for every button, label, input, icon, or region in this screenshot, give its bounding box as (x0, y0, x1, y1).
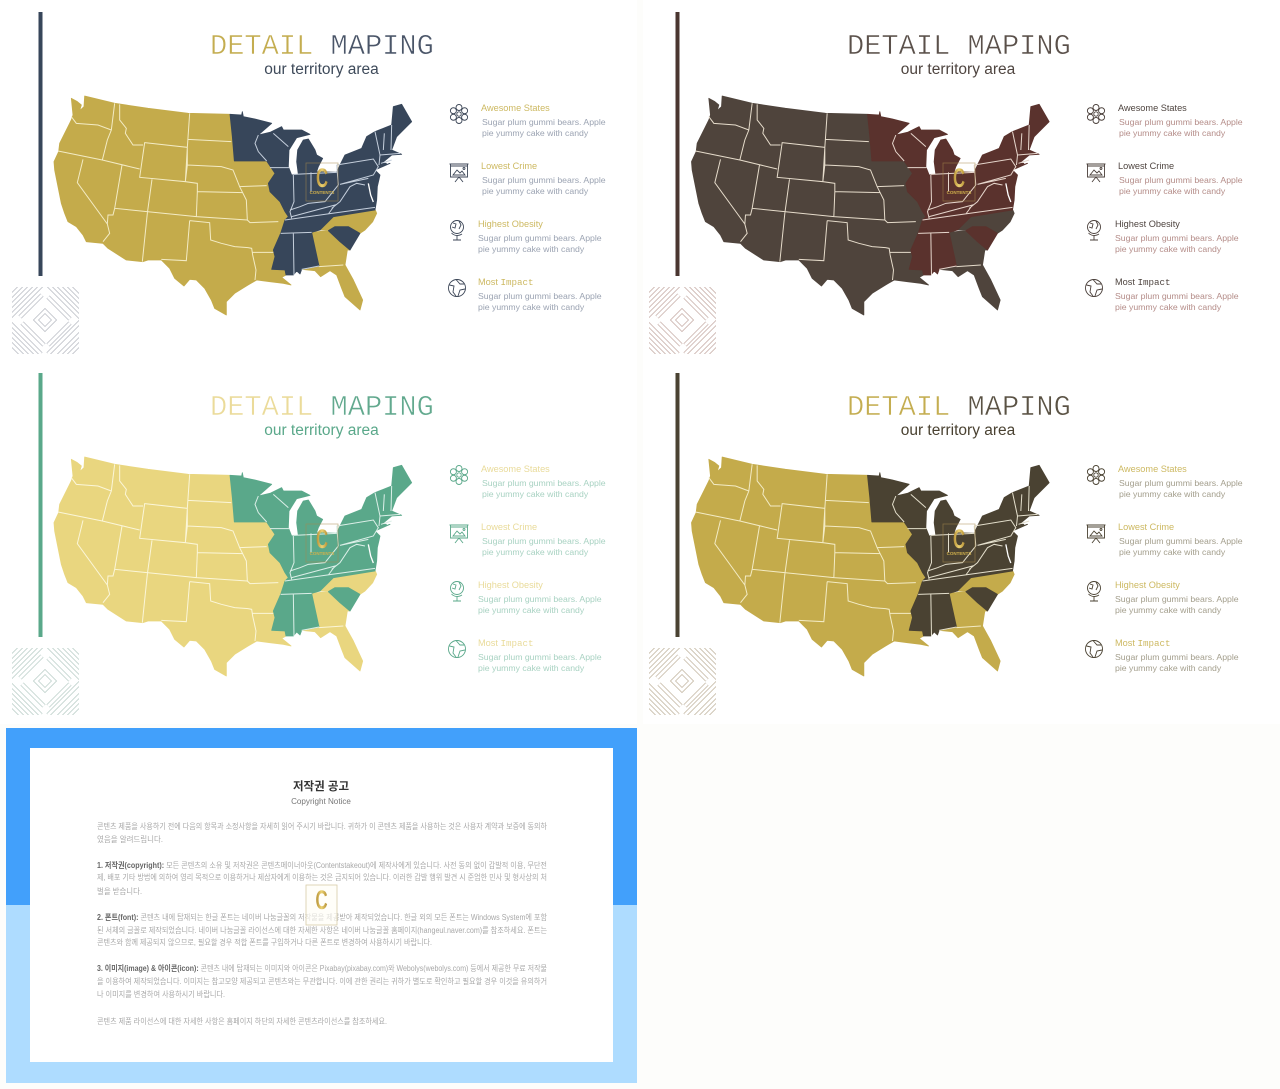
item: Most Impact: Most Impact (478, 638, 534, 649)
icon: presentation board (1086, 525, 1106, 543)
item: Awesome States: Sugar plum gummi bears. Apple (482, 478, 606, 488)
item: Awesome States: Awesome States (481, 103, 550, 113)
item: Awesome States: pie yummy cake with candy (1119, 128, 1226, 138)
item: Most Impact: pie yummy cake with candy (1115, 302, 1222, 312)
item: Most Impact: Sugar plum gummi bears. Apple (478, 652, 602, 662)
item: Highest Obesity: pie yummy cake with candy (1115, 605, 1222, 615)
item: Awesome States (1118, 464, 1243, 499)
item: Lowest Crime (481, 522, 606, 557)
item: Most Impact: Sugar plum gummi bears. Apple (1115, 291, 1239, 301)
watermark (306, 524, 338, 562)
icon: atom (450, 104, 468, 124)
item: Lowest Crime: Lowest Crime (1118, 161, 1174, 171)
item: Most Impact: Sugar plum gummi bears. Apple (1115, 652, 1239, 662)
copyright body text: 1. 저작권(copyright): 모든 콘텐츠의 소유 및 저작권은 콘텐츠메이너아웃(Contentstakeout)에 제작사에게 있습니다. 사전 동의 없이 갑발적 이용, 무단전 (97, 860, 547, 870)
item: Awesome States (481, 464, 606, 499)
panel: gold and olive map slide (643, 362, 1280, 724)
maze pattern (647, 285, 718, 356)
US map (691, 96, 1049, 315)
maze pattern (647, 646, 718, 717)
title: DETAIL MAPING (847, 391, 1071, 424)
icon: earth (448, 280, 466, 296)
item: Highest Obesity: pie yummy cake with candy (478, 605, 585, 615)
copyright body text: 콘텐츠와 함께 제공되지 않으므로, 필요할 경우 적합 폰트를 구입하거나 다른 폰트로 변경하여 사용하시기 바랍니다. (97, 937, 432, 947)
accent bar (676, 12, 680, 276)
icon: globe (1088, 582, 1100, 601)
copyright body text: 벌을 받습니다. (97, 886, 142, 896)
watermark (943, 524, 975, 562)
icon: atom (1087, 466, 1105, 484)
item: Awesome States: Sugar plum gummi bears. Apple (482, 117, 606, 127)
item: Lowest Crime: Lowest Crime (481, 161, 537, 171)
item: Most Impact (1115, 638, 1239, 673)
item: Lowest Crime (481, 161, 606, 196)
title: DETAIL MAPING (210, 30, 434, 63)
item: Most Impact: Most Impact (1115, 277, 1171, 288)
item: Most Impact (1115, 277, 1239, 312)
copyright body text: 였음을 알려드립니다. (97, 834, 163, 844)
copyright body text: 2. 폰트(font): 콘텐츠 내에 탑재되는 한글 폰트는 네이버 나눔글꼴의 저작물을 제공받아 제작되었습니다. 한글 외의 모든 폰트는 Windows System에 포함 (97, 912, 548, 922)
accent bar (676, 373, 680, 637)
item: Lowest Crime: pie yummy cake with candy (1119, 186, 1226, 196)
subtitle: our territory area (901, 422, 1016, 439)
item: Highest Obesity (478, 219, 602, 254)
item: Lowest Crime: Sugar plum gummi bears. Apple (482, 175, 606, 185)
copyright body text (97, 821, 548, 1026)
item: Highest Obesity: pie yummy cake with candy (1115, 244, 1222, 254)
copyright body text: 3. 이미지(image) & 아이콘(icon): 콘텐츠 내에 탑재되는 이미지와 아이콘은 Pixabay(pixabay.com)와 Webolys(webolys.com) 등에서 제공한 무료 저작물 (97, 963, 547, 973)
copyright body text: 된 서체의 글꼴로 제작되었습니다. 네이버 나눔글꼴 라이선스에 대한 자세한 사항은 네이버 나눔글꼴 홈페이지(hangeul.naver.com)를 참조하세요. 폰트는 (97, 925, 547, 935)
item: Lowest Crime: Lowest Crime (481, 522, 537, 532)
item: Awesome States: Sugar plum gummi bears. Apple (1119, 117, 1243, 127)
item: Lowest Crime (1118, 522, 1243, 557)
watermark (306, 163, 338, 201)
icon: globe (450, 582, 464, 601)
item: Lowest Crime: Lowest Crime (1118, 522, 1174, 532)
copyright body text: 제, 배포 기타 방법에 의하여 영리 목적으로 이용하거나 제삼자에게 이용하는 것은 금지되어 있습니다. 이러한 갑발 행위 발견 시 준엄한 민사 및 형사상의 처 (97, 872, 547, 882)
item: Highest Obesity: Sugar plum gummi bears. Apple (1115, 594, 1239, 604)
item: Most Impact (478, 638, 602, 673)
panel: pale yellow and green map slide (0, 362, 637, 724)
item: Awesome States: Awesome States (481, 464, 550, 474)
panel: gold and navy map slide (0, 0, 637, 362)
subtitle: our territory area (264, 61, 379, 78)
accent bar (38, 12, 42, 276)
item: Highest Obesity: Sugar plum gummi bears. Apple (478, 233, 602, 243)
copyright subheading: Copyright Notice (291, 797, 351, 806)
subtitle: our territory area (901, 61, 1016, 78)
item: Lowest Crime: Sugar plum gummi bears. Apple (1119, 175, 1243, 185)
panel: copyright notice (6, 728, 637, 1083)
watermark (943, 163, 975, 201)
panel: brown map slide (643, 0, 1280, 362)
item: Highest Obesity: pie yummy cake with candy (478, 244, 585, 254)
item: Awesome States: Awesome States (1118, 464, 1187, 474)
item: Highest Obesity (1115, 580, 1239, 615)
item: Lowest Crime: pie yummy cake with candy (1119, 547, 1226, 557)
item: Awesome States: Sugar plum gummi bears. Apple (1119, 478, 1243, 488)
item: Highest Obesity: Highest Obesity (1115, 580, 1180, 590)
icon: atom (1087, 104, 1105, 124)
item: Highest Obesity: Highest Obesity (478, 580, 543, 590)
item: Lowest Crime: pie yummy cake with candy (482, 547, 589, 557)
icon: presentation board (450, 525, 468, 543)
copyright body text: 을 이용하여 제작되었습니다. 이미지는 참고모양 제공되고 콘텐츠와는 무관합니다. 이에 관한 권리는 귀하가 별도로 확인하고 필요할 경우 이것을 유의하거 (97, 976, 547, 986)
title: DETAIL MAPING (847, 30, 1071, 63)
accent bar (38, 373, 42, 637)
item: Most Impact: pie yummy cake with candy (478, 663, 585, 673)
icon: globe (1088, 220, 1100, 240)
watermark (306, 885, 337, 925)
copyright body text: 콘텐츠 제품을 사용하기 전에 다음의 항목과 소정사항을 자세히 읽어 주시기 바랍니다. 귀하가 이 콘텐츠 제품을 사용하는 것은 사용자 계약과 보증에 동의하 (97, 821, 548, 831)
icon: earth (1086, 280, 1102, 296)
item: Highest Obesity: Sugar plum gummi bears. Apple (1115, 233, 1239, 243)
item: Highest Obesity (1115, 219, 1239, 254)
item: Awesome States: pie yummy cake with candy (482, 128, 589, 138)
icon: earth (448, 640, 466, 658)
item: Awesome States (1118, 103, 1243, 138)
item: Most Impact: Sugar plum gummi bears. Apple (478, 291, 602, 301)
item: Highest Obesity: Highest Obesity (1115, 219, 1180, 229)
item: Most Impact (478, 277, 602, 312)
item: Lowest Crime (1118, 161, 1243, 196)
maze pattern (10, 646, 81, 717)
item: Awesome States (481, 103, 606, 138)
watermark: C (315, 885, 328, 915)
copyright body text: 콘텐츠 제품 라이선스에 대한 자세한 사항은 홈페이지 하단의 자세한 콘텐츠라이선스를 참조하세요. (97, 1016, 387, 1026)
US map (54, 457, 412, 676)
US map (54, 96, 412, 315)
icon: presentation board (450, 164, 468, 182)
item: Lowest Crime: Sugar plum gummi bears. Apple (1119, 536, 1243, 546)
icon: globe (450, 220, 464, 240)
item: Lowest Crime: pie yummy cake with candy (482, 186, 589, 196)
item: Highest Obesity: Highest Obesity (478, 219, 543, 229)
copyright body text: 나 이미지를 변경하여 사용하시기 바랍니다. (97, 989, 225, 999)
item: Highest Obesity: Sugar plum gummi bears. Apple (478, 594, 602, 604)
item: Awesome States: Awesome States (1118, 103, 1187, 113)
item: Most Impact: Most Impact (1115, 638, 1171, 649)
item: Most Impact: pie yummy cake with candy (478, 302, 585, 312)
item: Highest Obesity (478, 580, 602, 615)
icon: atom (450, 466, 468, 484)
item: Awesome States: pie yummy cake with candy (482, 489, 589, 499)
item: Lowest Crime: Sugar plum gummi bears. Apple (482, 536, 606, 546)
item: Most Impact: pie yummy cake with candy (1115, 663, 1222, 673)
US map (691, 457, 1049, 676)
icon: earth (1086, 640, 1102, 658)
item: Most Impact: Most Impact (478, 277, 534, 288)
title: DETAIL MAPING (210, 391, 434, 424)
maze pattern (10, 285, 81, 356)
item: Awesome States: pie yummy cake with candy (1119, 489, 1226, 499)
copyright heading: 저작권 공고 (293, 779, 349, 793)
subtitle: our territory area (264, 422, 379, 439)
icon: presentation board (1086, 164, 1106, 182)
